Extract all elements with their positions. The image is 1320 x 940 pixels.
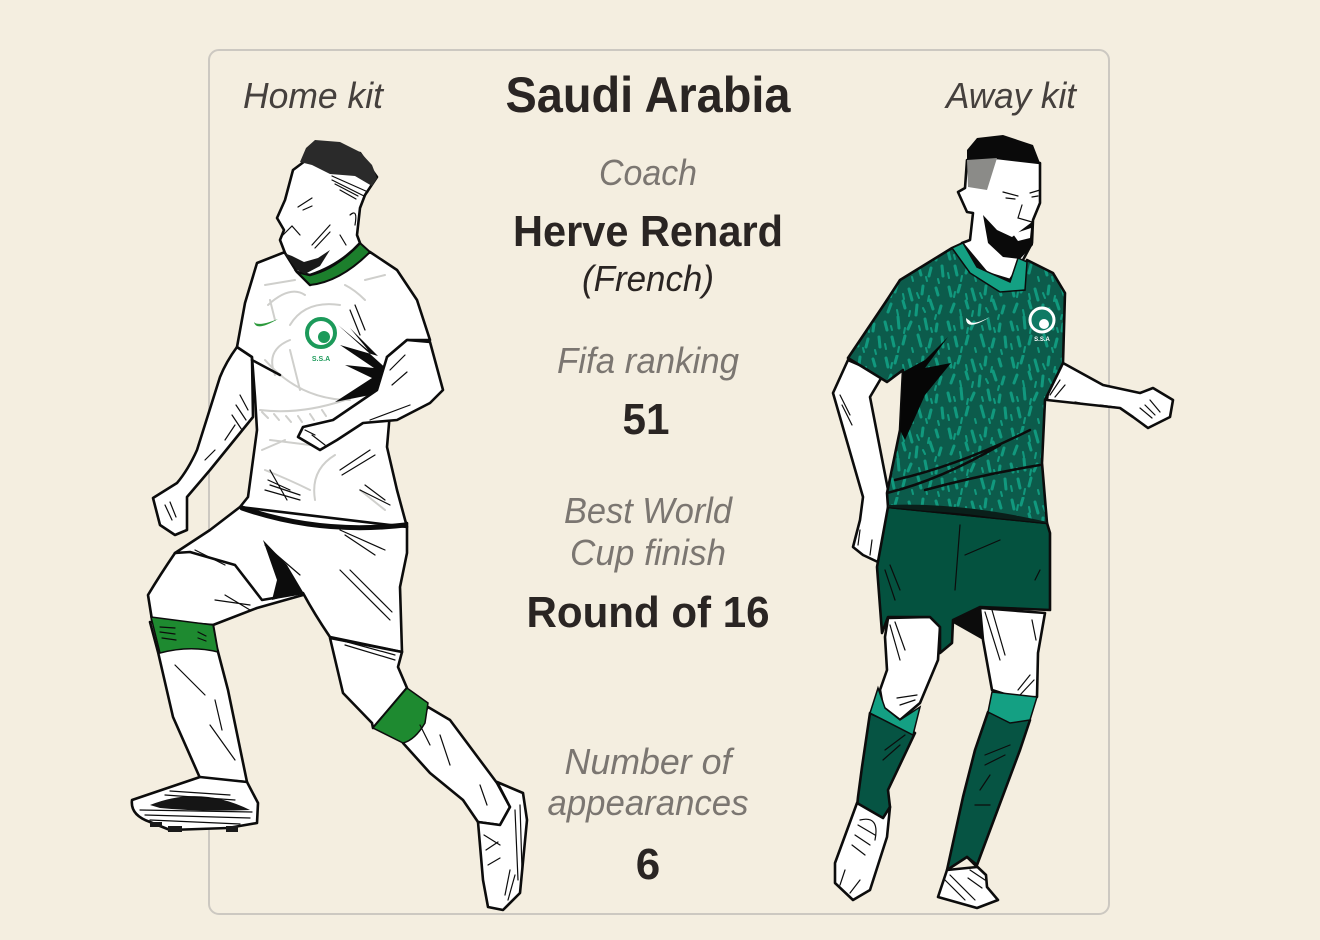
nike swoosh (254, 319, 278, 326)
home shirt (237, 252, 430, 527)
nike swoosh (966, 317, 990, 325)
shirt shadow (887, 337, 1047, 525)
illustration: away kit player (833, 135, 1173, 908)
text block: number of appearances: 6 (636, 840, 660, 889)
text block: number of appearances: appearances (548, 782, 748, 823)
right boot (478, 782, 527, 910)
left boot (835, 803, 890, 900)
left sock teal band (870, 688, 920, 735)
left sock green band (151, 617, 218, 653)
sock hatching (883, 735, 1010, 805)
crest (307, 319, 335, 363)
left leg thigh (148, 540, 303, 625)
right arm (1047, 363, 1173, 428)
home shorts (175, 507, 407, 652)
crest: S.S.A (1034, 337, 1051, 343)
hair fade (332, 176, 368, 199)
away collar (952, 243, 1027, 292)
left arm (833, 360, 898, 563)
hair fade (967, 158, 997, 190)
left sock (857, 713, 915, 820)
crest: S.S.A (312, 356, 330, 363)
left arm (153, 347, 253, 535)
right sock (947, 712, 1030, 870)
home hair (300, 140, 377, 186)
right boot (938, 857, 998, 908)
text block: best world cup finish: Round of 16 (526, 588, 770, 637)
label: away kit: Away kit (944, 75, 1078, 116)
text block: number of appearances: Number of (564, 741, 735, 782)
right sock teal band (988, 692, 1037, 723)
beard (284, 250, 330, 274)
beard (983, 215, 1033, 259)
shirt armpit fan (335, 325, 390, 402)
band hatching (160, 627, 206, 641)
text block: number of appearances (548, 741, 748, 889)
sock hatching (175, 665, 487, 805)
label: home kit: Home kit (243, 75, 385, 116)
green collar (297, 243, 370, 285)
text block: coach: Herve Renard (513, 207, 783, 256)
mouth (1013, 228, 1031, 241)
text block: fifa ranking (557, 340, 739, 444)
text block: coach (513, 152, 783, 299)
right sock (403, 707, 510, 825)
shorts shadow (950, 605, 983, 640)
thigh hatching (890, 610, 1036, 705)
neck and head (277, 153, 377, 275)
right sock green band (373, 688, 428, 743)
neck and head (958, 158, 1040, 280)
text block: best world cup finish (526, 490, 770, 637)
text block: fifa ranking: 51 (622, 395, 670, 444)
face lines (282, 198, 356, 248)
text block: coach: (French) (582, 258, 714, 299)
right knee (330, 638, 407, 728)
left sock (150, 622, 247, 782)
right thigh (980, 608, 1045, 698)
right arm (298, 340, 443, 450)
shirt folds (265, 305, 390, 505)
title: Saudi Arabia (506, 67, 792, 123)
away shorts (877, 507, 1050, 653)
text block: best world cup finish: Cup finish (570, 532, 726, 573)
left boot (132, 777, 258, 830)
panel: team card (209, 50, 1109, 914)
eyes and nose (1003, 190, 1040, 222)
away hair (967, 135, 1040, 163)
shorts hatching (195, 530, 395, 660)
away shirt (848, 243, 1065, 523)
shorts shadow (263, 540, 303, 600)
left thigh (880, 617, 940, 720)
text block: fifa ranking: Fifa ranking (557, 340, 739, 381)
illustration: home kit player (132, 140, 527, 910)
crest (1030, 308, 1054, 343)
text block: best world cup finish: Best World (564, 490, 733, 531)
text block: coach: Coach (599, 152, 697, 193)
shirt grey pattern (260, 275, 385, 510)
